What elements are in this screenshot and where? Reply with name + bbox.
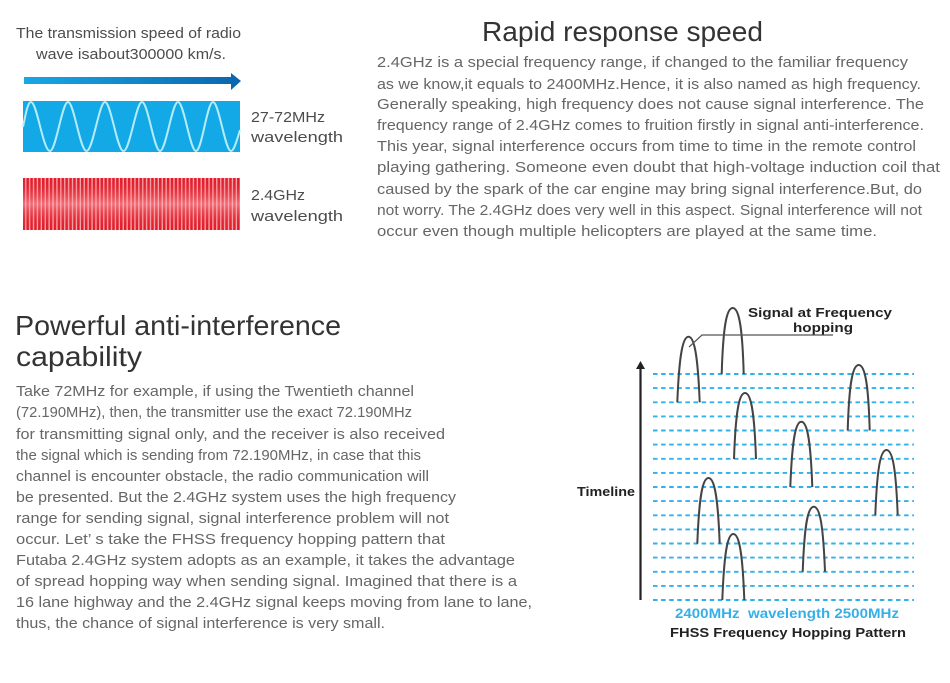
label: 27-72MHz wavelength	[250, 109, 343, 146]
text block: rapid response description	[377, 54, 941, 240]
label: 27-72MHz wavelength: 27-72MHz	[251, 109, 325, 126]
text block: anti-interference description: range for sending signal, signal interference problem will not	[16, 510, 450, 527]
callout leader line	[689, 335, 833, 347]
text block: rapid response description: as we know,it equals to 2400MHz.Hence, it is also named as high frequency.	[377, 76, 921, 93]
caption: FHSS frequency hopping pattern: FHSS Frequency Hopping Pattern	[670, 625, 906, 640]
heading: Powerful anti-interference capability: capability	[16, 341, 142, 372]
text block: anti-interference description: Futaba 2.4GHz system adopts as an example, it takes the advantage	[16, 552, 515, 569]
heading: transmission speed	[16, 25, 241, 63]
callout: signal at frequency hopping: Signal at Frequency	[748, 305, 893, 320]
heading: transmission speed: wave isabout300000 km/s.	[35, 46, 226, 63]
heading: Powerful anti-interference capability: Powerful anti-interference	[15, 310, 341, 341]
heading: Powerful anti-interference capability	[15, 310, 341, 372]
chart: FHSS frequency hopping pattern	[577, 305, 914, 640]
chart: 2.4GHz wave	[23, 178, 240, 230]
label: 2.4GHz wavelength: 2.4GHz	[251, 187, 305, 204]
label: 2.4GHz wavelength	[250, 187, 343, 225]
label: 2.4GHz wavelength: wavelength	[250, 208, 343, 225]
text block: rapid response description: not worry. The 2.4GHz does very well in this aspect. Signal interference will not	[377, 202, 923, 219]
frequency grid lines	[653, 374, 914, 600]
label: timeline: Timeline	[577, 484, 635, 499]
text block: rapid response description: occur even though multiple helicopters are played at the same time.	[377, 223, 877, 240]
text block: rapid response description: frequency range of 2.4GHz comes to fruition firstly in signal anti-interference.	[377, 117, 924, 134]
text block: rapid response description: caused by the spark of the car engine may bring signal interference.But, do	[377, 181, 922, 198]
heading: Rapid response speed: Rapid response speed	[482, 16, 763, 47]
text block: anti-interference description: Take 72MHz for example, if using the Twentieth channel	[16, 383, 414, 400]
text block: anti-interference description: be presented. But the 2.4GHz system uses the high frequency	[16, 489, 457, 506]
text block: rapid response description: Generally speaking, high frequency does not cause signal interference. The	[377, 96, 924, 113]
text block: anti-interference description: thus, the chance of signal interference is very small.	[16, 615, 385, 632]
chart: 27-72MHz wave	[23, 101, 240, 152]
text block: rapid response description: This year, signal interference occurs from time to time in the remote control	[377, 138, 916, 155]
signal humps	[677, 308, 898, 600]
text block: anti-interference description: occur. Let’ s take the FHSS frequency hopping pattern that	[16, 531, 446, 548]
callout: signal at frequency hopping: hopping	[793, 320, 853, 335]
text block: anti-interference description: the signal which is sending from 72.190MHz, in case that this	[16, 447, 421, 464]
text block: anti-interference description: channel is encounter obstacle, the radio communication will	[16, 468, 429, 485]
text block: rapid response description: playing gathering. Someone even doubt that high-voltage induction coil that	[377, 159, 941, 176]
heading: transmission speed: The transmission speed of radio	[16, 25, 241, 42]
text block: anti-interference description	[16, 383, 532, 632]
arrow: propagation direction	[24, 73, 241, 90]
text block: anti-interference description: for transmitting signal only, and the receiver is also received	[16, 426, 445, 443]
label: 27-72MHz wavelength: wavelength	[250, 129, 343, 146]
panel: radio wave comparison	[16, 25, 343, 230]
text block: rapid response description: 2.4GHz is a special frequency range, if changed to the familiar frequency	[377, 54, 909, 71]
callout: signal at frequency hopping	[748, 305, 893, 335]
text block: anti-interference description: 16 lane highway and the 2.4GHz signal keeps moving from lane to lane,	[16, 594, 532, 611]
axis label: frequency range: 2400MHz wavelength 2500MHz	[675, 606, 899, 621]
arrow: timeline axis	[636, 361, 645, 600]
text block: anti-interference description: (72.190MHz), then, the transmitter use the exact 72.190MHz	[16, 404, 412, 421]
text block: anti-interference description: of spread hopping way when sending signal. Imagined that there is a	[16, 573, 518, 590]
